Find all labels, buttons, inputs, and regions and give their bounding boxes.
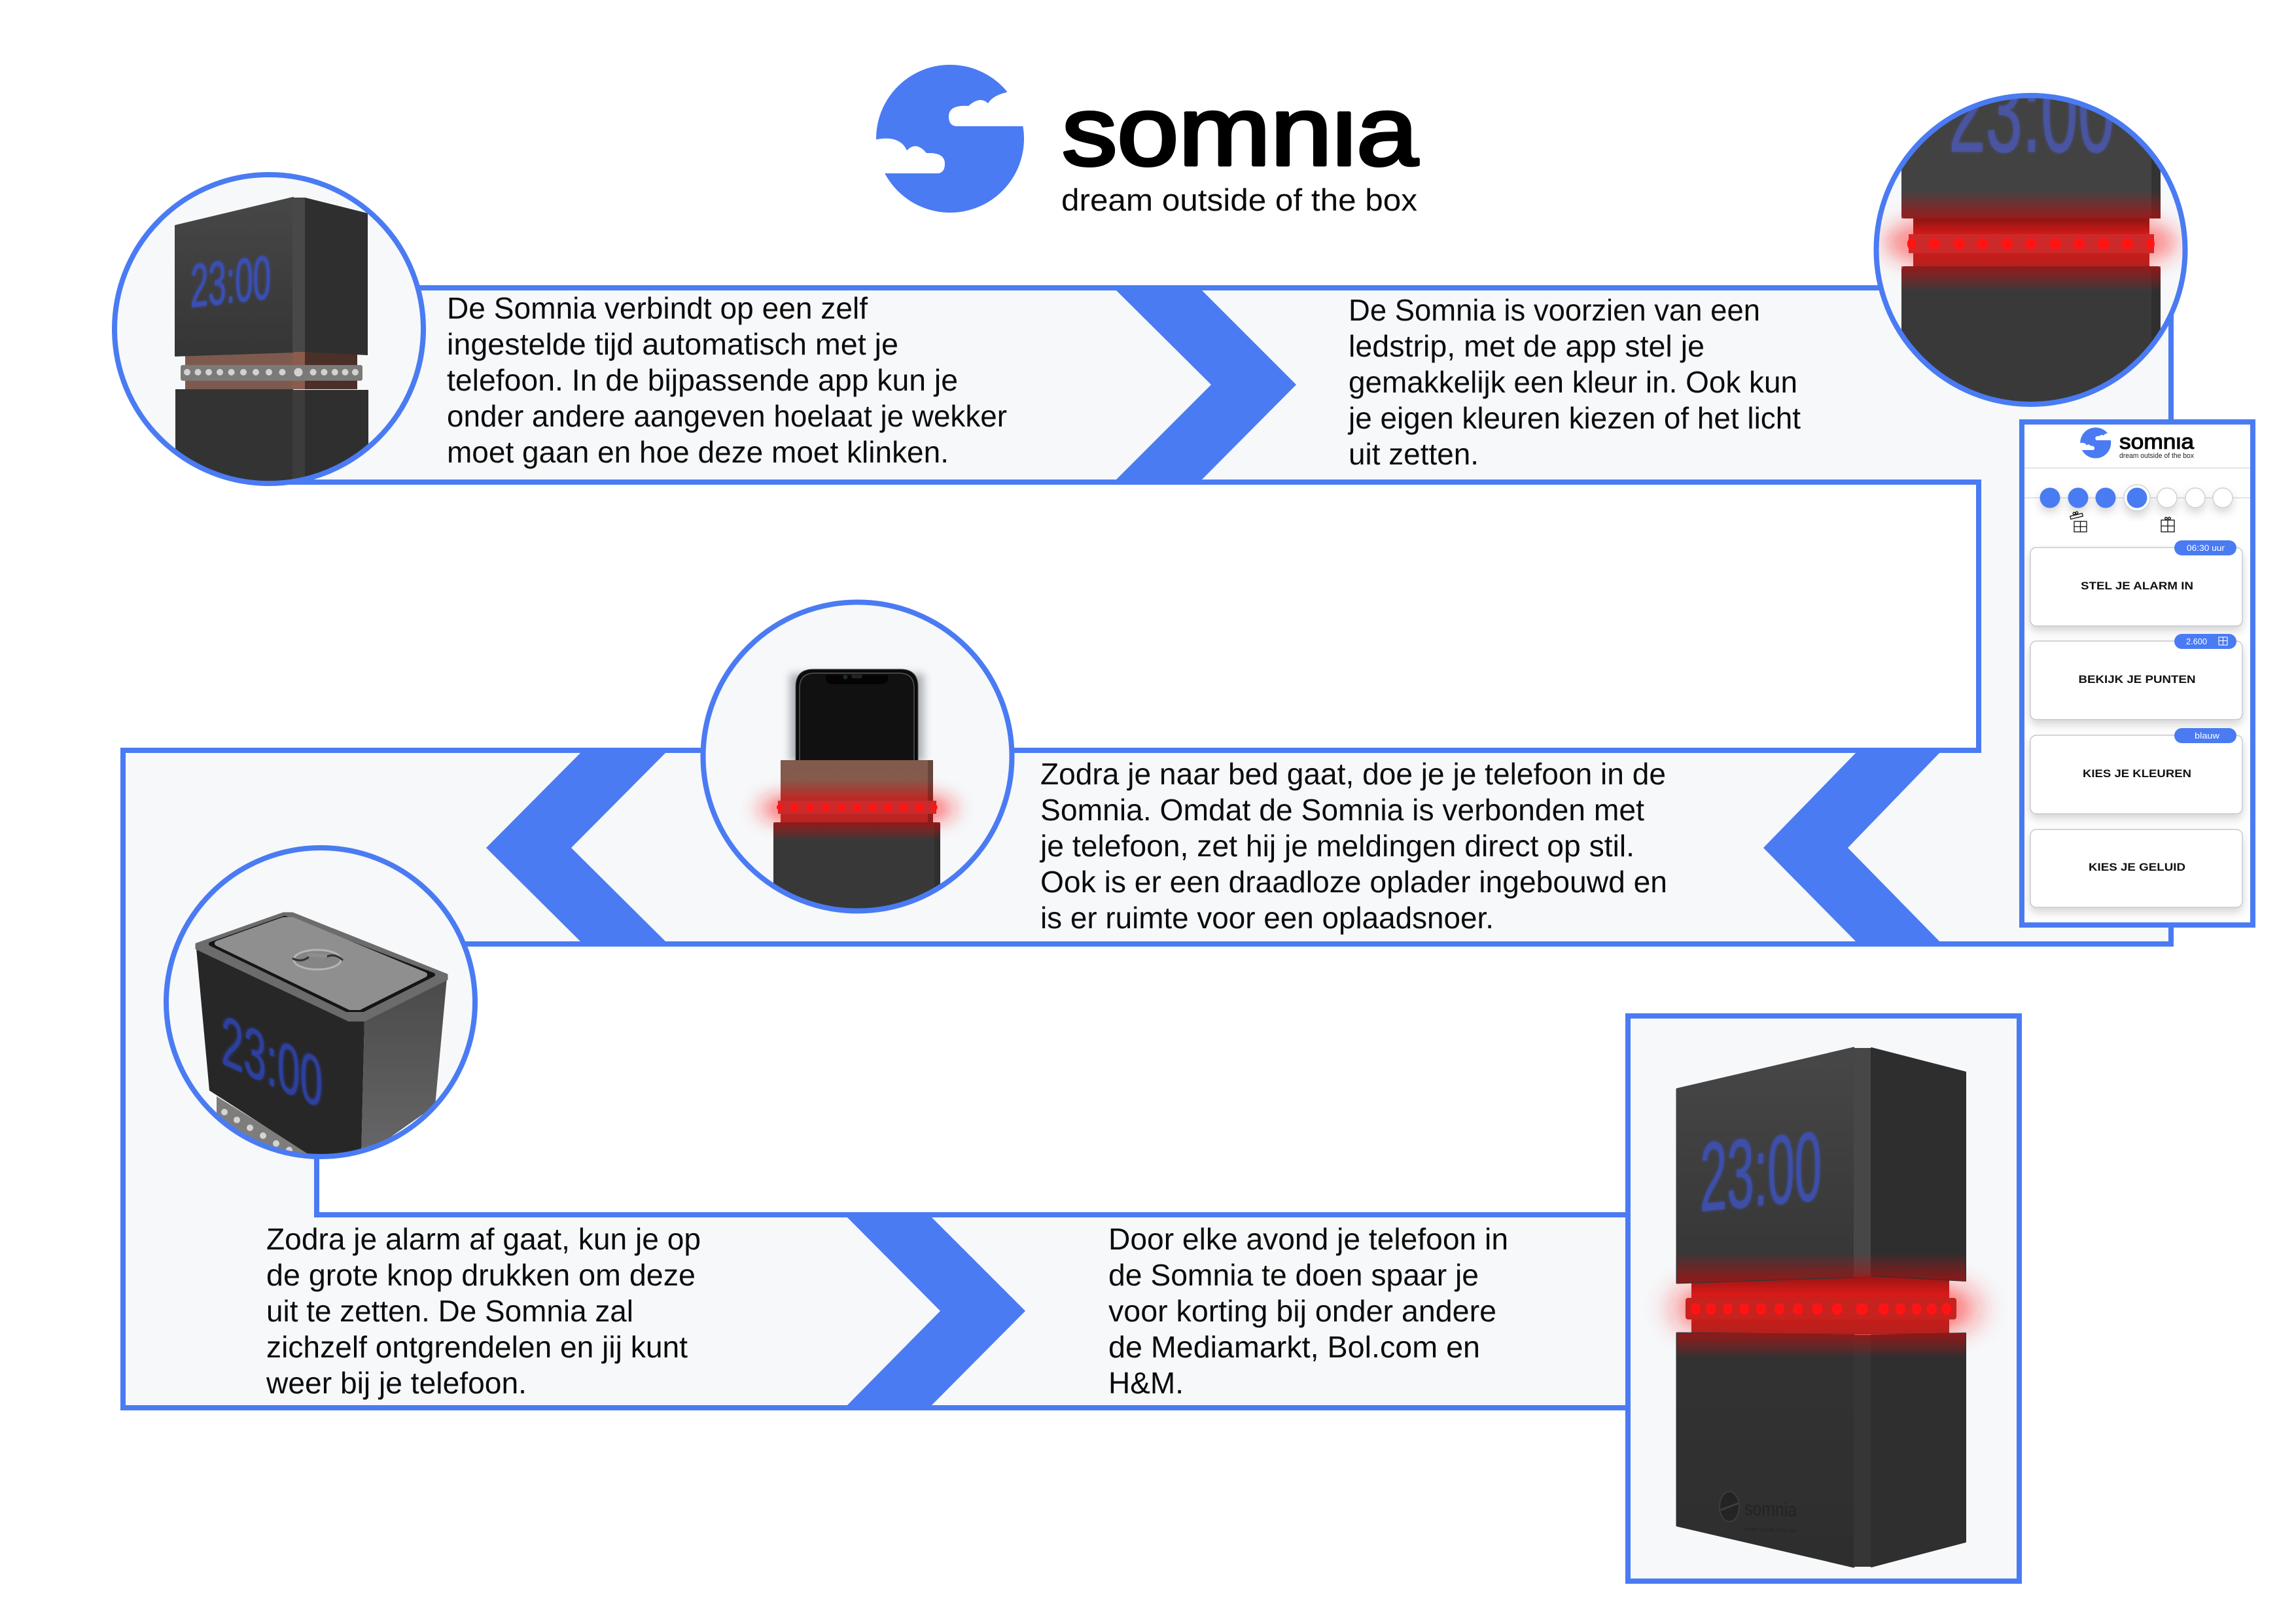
embossed device logo: somnia: [1744, 1498, 1797, 1521]
text block: step 2: je eigen kleuren kiezen of het licht: [1347, 401, 1801, 435]
text block: step 3: is er ruimte voor een oplaadsnoer.: [1040, 901, 1494, 935]
card: sound: KIES JE GELUID: [2089, 861, 2185, 873]
device lower body: [1901, 266, 2161, 402]
pill: chosen colour: [2174, 728, 2236, 743]
circle: device from above with top button: [166, 848, 475, 1168]
pill: points balance: 2.600: [2186, 637, 2207, 646]
device upper body: [1677, 1048, 1966, 1283]
app header logo: dream outside of the box: [2119, 452, 2194, 460]
circle: device with clock and idle LED strip: [115, 175, 423, 508]
text block: step 3: Somnia. Omdat de Somnia is verbonden met: [1040, 793, 1644, 827]
LED strip seen from above: [217, 1096, 308, 1154]
red glow: [1883, 208, 2178, 276]
text block: step 5: Door elke avond je telefoon in: [1108, 1222, 1508, 1256]
app header logo: [2079, 427, 2194, 460]
progress tracker: [2024, 485, 2250, 511]
device upper body: [1901, 98, 2161, 218]
device top rim: [196, 913, 447, 1021]
LED strip lit red: [777, 801, 938, 814]
brown charging block lit red: [781, 760, 933, 822]
phone: [796, 669, 918, 762]
device middle band: [185, 352, 357, 389]
text block: step 4: weer bij je telefoon.: [266, 1366, 527, 1400]
card: colours: KIES JE KLEUREN: [2083, 767, 2191, 780]
device lower body: [175, 389, 368, 481]
pill: alarm time: [2174, 540, 2236, 555]
card: colours: [2030, 728, 2242, 814]
text block: step 4: uit te zetten. De Somnia zal: [266, 1294, 633, 1328]
text block: step 3: je telefoon, zet hij je meldingen direct op stil.: [1039, 829, 1634, 863]
embossed device logo: [1720, 1492, 1797, 1533]
text block: step 1: De Somnia verbindt op een zelf: [447, 291, 868, 325]
process band: snaking flow panel: [123, 288, 2171, 1408]
tagline: dream outside of the box: [1061, 183, 1417, 217]
device lower body: [1677, 1333, 1966, 1567]
circle: device with red LED strip: [1874, 93, 2188, 407]
text block: step 3: Ook is er een draadloze oplader ingebouwd en: [1040, 865, 1667, 899]
text block: step 1: telefoon. In de bijpassende app kun je: [447, 363, 958, 397]
LED strip lit red: [1907, 234, 2155, 253]
top recess: [211, 918, 433, 1010]
chevron arrow: step 4 to 5: [845, 1215, 1025, 1408]
device lower body: [773, 822, 940, 908]
clock display: 23:00: 23:00: [1949, 46, 2115, 177]
text block: step 4: Zodra je alarm af gaat, kun je op: [266, 1222, 701, 1256]
phone shadow: [790, 674, 924, 762]
text block: step 2: gemakkelijk een kleur in. Ook kun: [1349, 365, 1797, 399]
red glow: [1674, 1281, 1977, 1336]
red band: [1691, 1273, 1949, 1334]
text block: step 2: uit zetten.: [1349, 437, 1479, 471]
circle: phone placed in device: [703, 602, 1012, 928]
device upper body: [175, 198, 368, 356]
pill: alarm time: 06:30 uur: [2187, 543, 2225, 553]
button logo: [292, 950, 343, 969]
text block: step 2: ledstrip, met de app stel je: [1349, 329, 1704, 363]
text block: step 5: [1108, 1222, 1508, 1400]
text block: step 5: de Mediamarkt, Bol.com en: [1108, 1330, 1480, 1364]
text block: step 4: de grote knop drukken om deze: [266, 1258, 696, 1292]
LED strip with off LEDs: [181, 365, 362, 381]
text block: step 1: moet gaan en hoe deze moet klinken.: [447, 435, 949, 469]
card: alarm: STEL JE ALARM IN: [2081, 580, 2193, 592]
LED strip lit red: [1686, 1298, 1956, 1319]
red glow: [759, 794, 955, 823]
clock display: 23:00: 23:00: [190, 243, 271, 321]
logo: somnia: [874, 59, 1419, 217]
text block: step 4: zichzelf ontgrendelen en jij kunt: [266, 1330, 688, 1364]
embossed device logo: dream outside of the box: [1745, 1526, 1796, 1533]
logo mark: moon with clouds: [874, 59, 1029, 213]
text block: step 1: ingestelde tijd automatisch met je: [447, 327, 898, 361]
text block: step 5: voor korting bij onder andere: [1108, 1294, 1496, 1328]
pill: chosen colour: blauw: [2195, 731, 2220, 741]
product panel: large device: [1628, 1016, 2019, 1581]
top button: [217, 920, 425, 1007]
card: points: BEKIJK JE PUNTEN: [2078, 673, 2196, 686]
text block: step 4: [266, 1222, 701, 1400]
card: alarm: [2030, 540, 2242, 626]
icon: opened gift: [2070, 512, 2087, 532]
text block: step 1: onder andere aangeven hoelaat je wekker: [447, 399, 1007, 433]
red band: [1913, 218, 2149, 267]
text block: step 2: [1347, 293, 1801, 471]
device side face: [361, 978, 447, 1158]
header divider: [2024, 467, 2250, 468]
text block: step 3: [1039, 757, 1667, 935]
wordmark: somnia: [1062, 76, 1419, 186]
pill: points balance: [2174, 634, 2236, 649]
text block: step 5: H&M.: [1108, 1366, 1184, 1400]
text block: step 3: Zodra je naar bed gaat, doe je je telefoon in de: [1040, 757, 1666, 791]
icon: closed gift: [2161, 517, 2174, 532]
card: points: [2030, 634, 2242, 720]
chevron arrow: step 3 to 4: [486, 750, 668, 944]
device front face: [196, 949, 364, 1158]
app header logo: somnia: [2119, 430, 2194, 453]
card: sound: [2030, 829, 2242, 907]
phone app panel: [2022, 422, 2253, 925]
chevron arrow: step 1 to 2: [1114, 288, 1296, 482]
text block: step 1: [447, 291, 1007, 469]
clock display: 23:00: 23:00: [221, 1000, 323, 1125]
chevron arrow: step 2 to 3: [1763, 750, 1942, 944]
text block: step 5: de Somnia te doen spaar je: [1108, 1258, 1479, 1292]
product panel: large device: 23:00: [1700, 1111, 1822, 1232]
text block: step 2: De Somnia is voorzien van een: [1349, 293, 1760, 327]
